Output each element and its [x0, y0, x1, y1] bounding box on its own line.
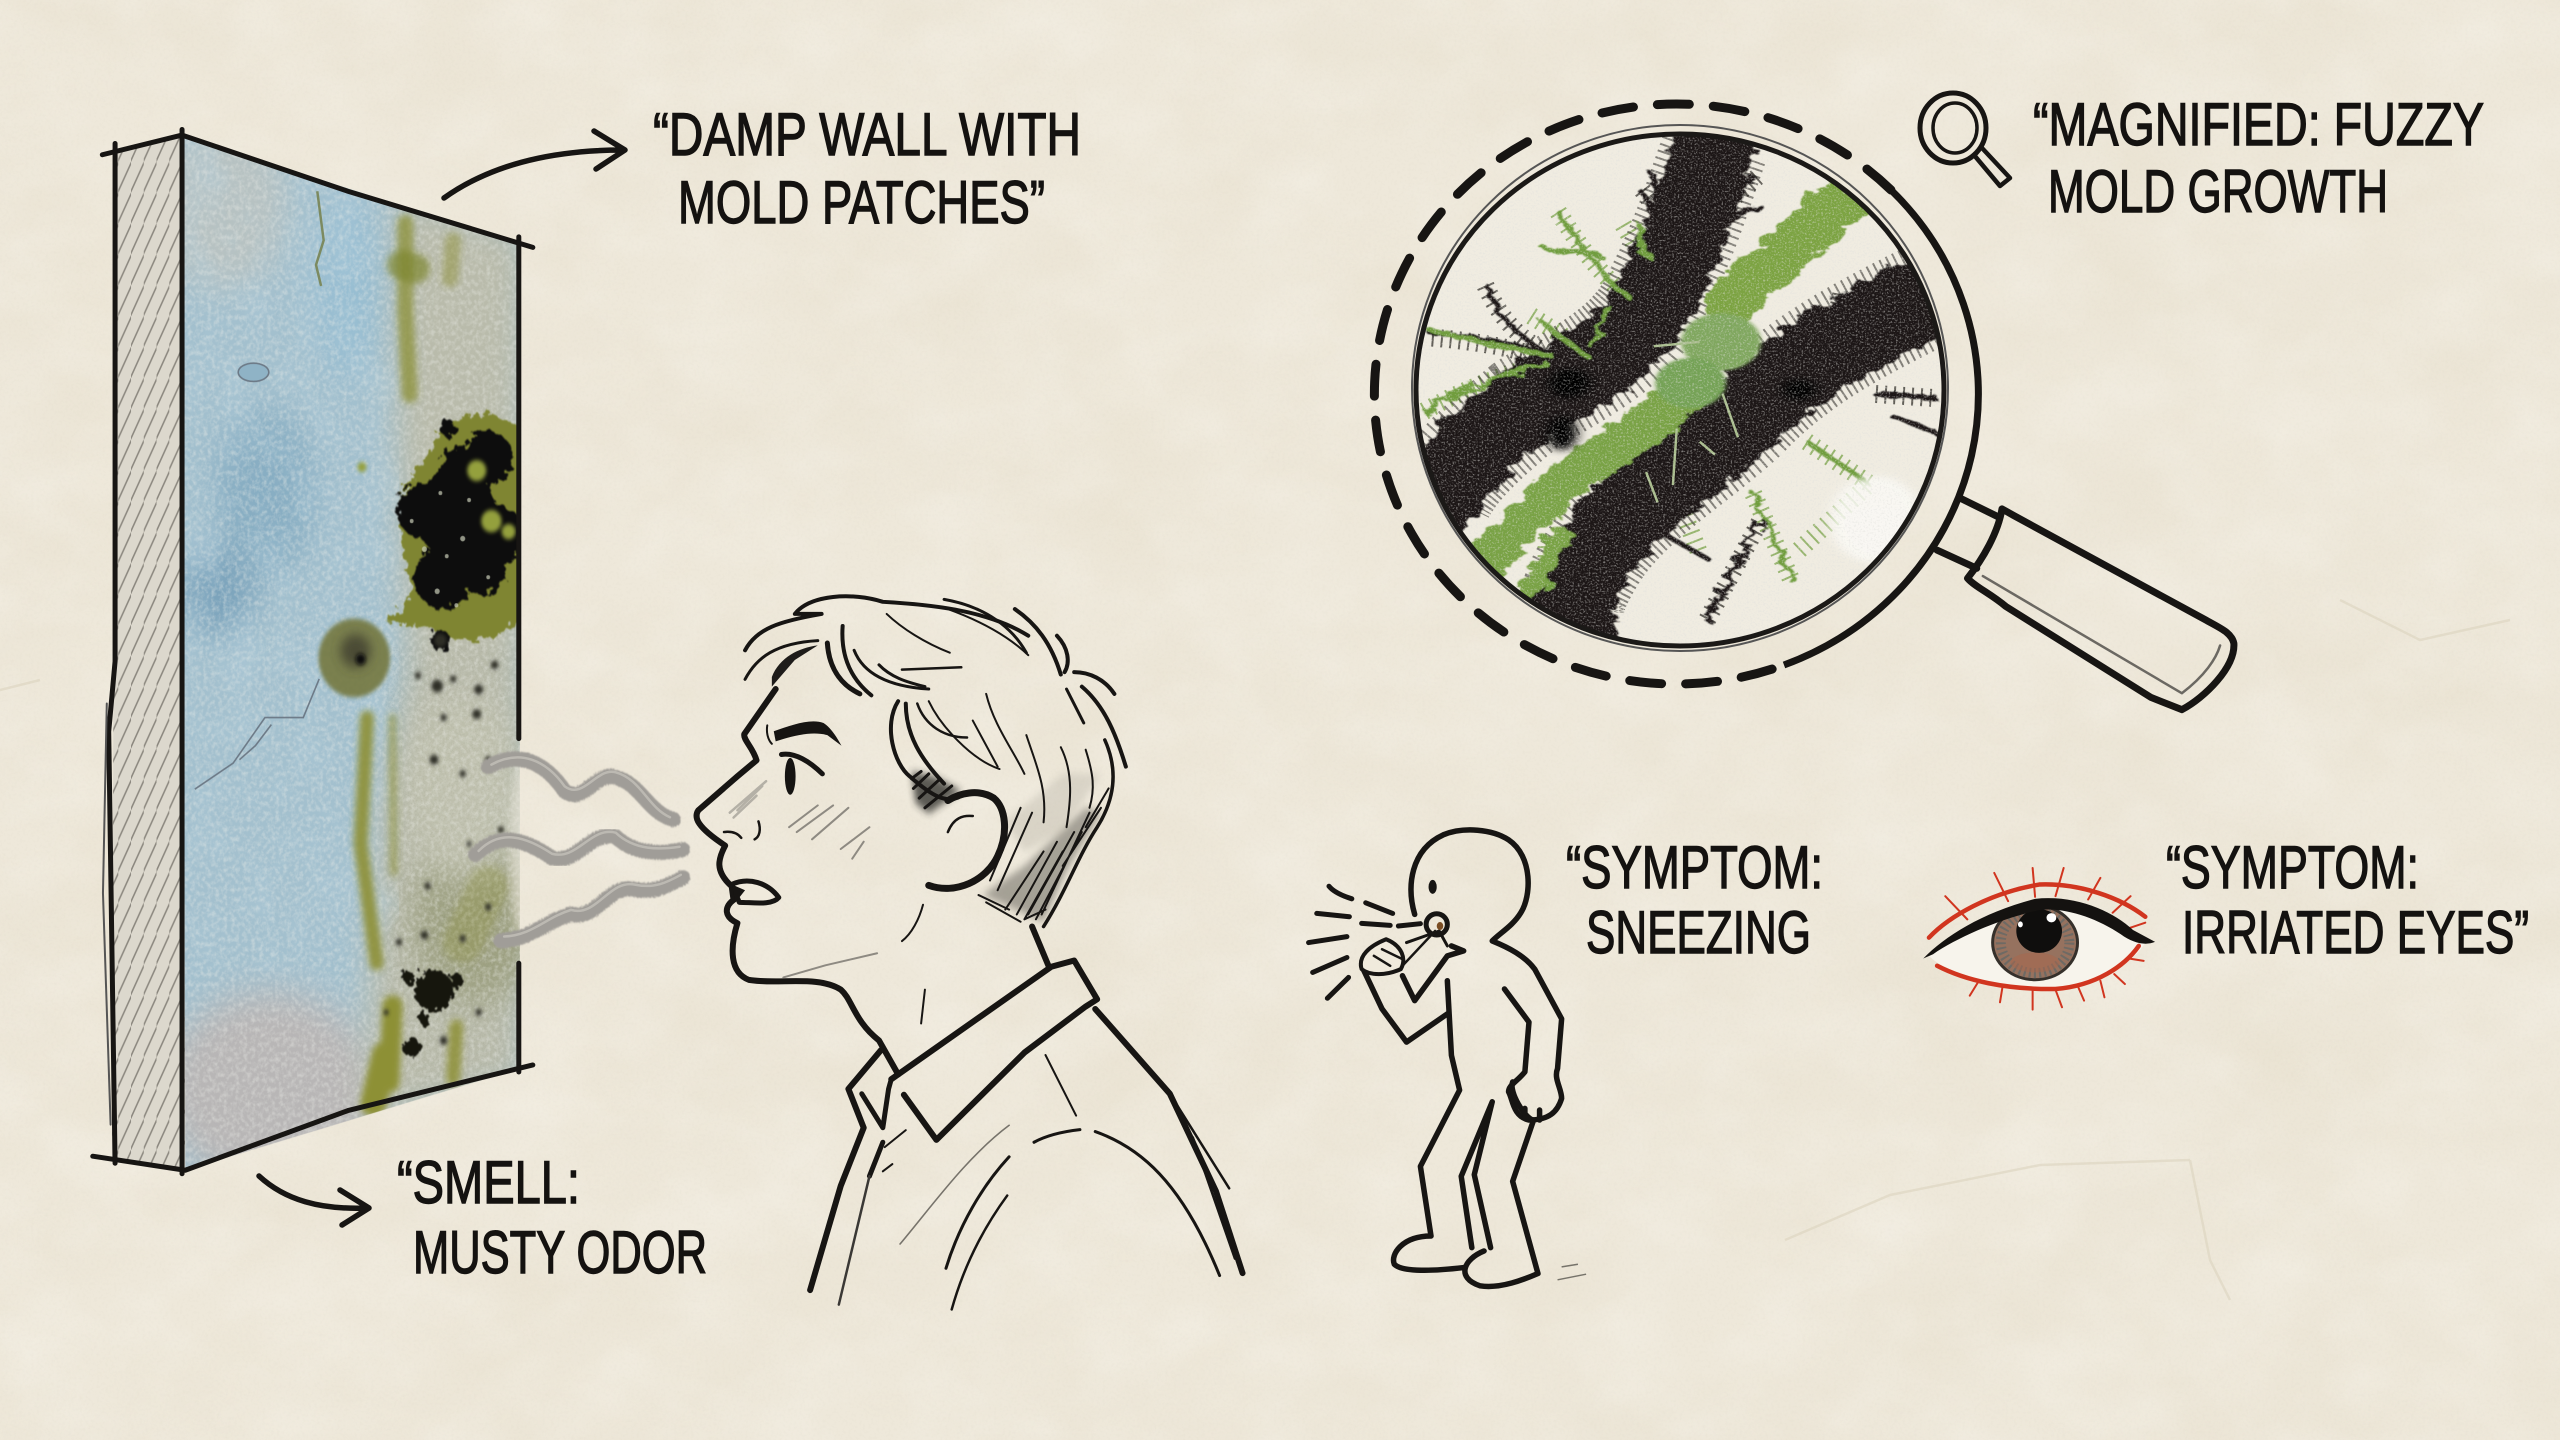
ear	[929, 793, 1005, 888]
lens highlight	[1830, 476, 1922, 563]
label: magnified fuzzy mold growth: MOLD GROWTH	[2048, 158, 2388, 225]
mold patch: round olive spot	[319, 619, 390, 697]
collar and shirt	[810, 927, 1243, 1309]
red lid lines	[1929, 868, 2145, 1010]
sneeze lines	[1309, 886, 1420, 998]
label: smell musty odor: “SMELL:	[397, 1149, 580, 1216]
hand at nose	[1361, 931, 1447, 974]
dark core shadows	[1547, 368, 1816, 450]
person in profile	[697, 596, 1243, 1309]
magnifying glass	[1374, 104, 2234, 710]
wall front: watercolor damp and mold	[184, 138, 520, 1168]
mold patch: olive ring	[386, 413, 523, 641]
hair shading	[772, 645, 1101, 922]
fuzzy edges of bands	[1439, 147, 1715, 498]
wall scratches and stain	[195, 191, 324, 789]
smell waves	[475, 757, 683, 941]
damp wall with mold patches	[93, 121, 543, 1188]
solid outer ring	[1784, 190, 1978, 665]
label: damp wall with mold patches: “DAMP WALL WITH	[653, 101, 1081, 168]
arrow: to smell label	[259, 1176, 369, 1225]
lens with fuzzy mold	[1410, 130, 1950, 650]
green mold strands	[1424, 194, 1868, 598]
black mold strands	[1432, 147, 1937, 632]
eye	[781, 754, 822, 795]
arrow: to wall label	[444, 131, 625, 198]
face details	[1426, 880, 1447, 935]
mold speckles	[415, 633, 504, 911]
mold patch: black colony	[397, 420, 525, 651]
black upper lid	[1923, 898, 2155, 959]
wall side face with hatching	[112, 135, 185, 1170]
nose, cheek and jaw details	[724, 725, 925, 1024]
mold patch: lower black colony	[403, 970, 463, 1057]
mold bristles	[1424, 177, 1937, 619]
dashed outer ring	[1374, 104, 1891, 684]
wall ink outlines	[93, 129, 533, 1174]
label: smell musty odor: MUSTY ODOR	[413, 1219, 707, 1286]
icon: small magnifying glass	[1920, 93, 2010, 186]
icon: irritated red eye	[1923, 868, 2155, 1010]
hair outline and strands	[745, 596, 1126, 927]
face profile	[697, 689, 898, 1074]
label: symptom sneezing: “SYMPTOM:	[1566, 834, 1823, 901]
scuff marks	[1558, 1264, 1586, 1280]
olive drips	[361, 223, 488, 1104]
eyebrow	[774, 721, 841, 746]
label: symptom irritated eyes: “SYMPTOM:	[2166, 834, 2419, 901]
body outline	[1362, 830, 1562, 1286]
sneezing figure	[1309, 830, 1586, 1286]
handle	[1937, 498, 2234, 710]
label: damp wall with mold patches: MOLD PATCHES”	[678, 169, 1045, 236]
mist at wall edge	[506, 767, 520, 948]
iris	[1993, 905, 2078, 980]
sclera	[1929, 903, 2145, 987]
green mold nodule	[1646, 313, 1761, 502]
mouth	[732, 881, 779, 903]
lens rim	[1412, 125, 1948, 651]
label: symptom sneezing: SNEEZING	[1586, 899, 1811, 966]
